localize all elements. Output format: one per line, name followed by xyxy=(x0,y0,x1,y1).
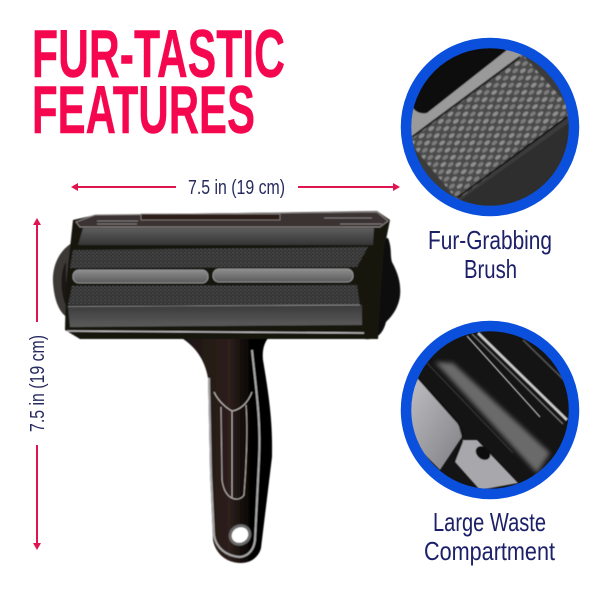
detail circle: brush close-up xyxy=(400,30,580,220)
label: Large Waste Compartment xyxy=(424,507,556,566)
top ridge xyxy=(76,212,388,227)
centre grip bars xyxy=(73,269,353,283)
label: Fur-Grabbing Brush: Fur-Grabbing xyxy=(428,225,552,255)
upper brush strip xyxy=(70,247,368,268)
title: FUR-TASTIC xyxy=(32,16,285,92)
label: Fur-Grabbing Brush: Brush xyxy=(464,254,517,284)
height dimension: 7.5 in (19 cm) xyxy=(27,218,49,550)
roller handle xyxy=(178,336,272,563)
detail circle: waste compartment close-up xyxy=(400,326,574,494)
lower brush strip xyxy=(68,285,360,305)
left knob xyxy=(53,243,72,318)
product: pet hair roller xyxy=(53,211,400,563)
width dimension: 7.5 in (19 cm): 7.5 in (19 cm) xyxy=(188,177,285,199)
right knob xyxy=(364,238,400,339)
title xyxy=(32,16,285,148)
title: FEATURES xyxy=(32,72,255,148)
label: Fur-Grabbing Brush xyxy=(428,225,552,284)
label: Large Waste Compartment: Compartment xyxy=(424,536,556,566)
label: Large Waste Compartment: Large Waste xyxy=(433,507,546,537)
roller body xyxy=(65,211,390,339)
upper cover panel xyxy=(78,228,374,245)
width dimension: 7.5 in (19 cm) xyxy=(71,177,400,199)
bottom rim xyxy=(67,331,364,333)
lower cover panel xyxy=(68,305,362,327)
height dimension: 7.5 in (19 cm): 7.5 in (19 cm) xyxy=(27,335,49,432)
